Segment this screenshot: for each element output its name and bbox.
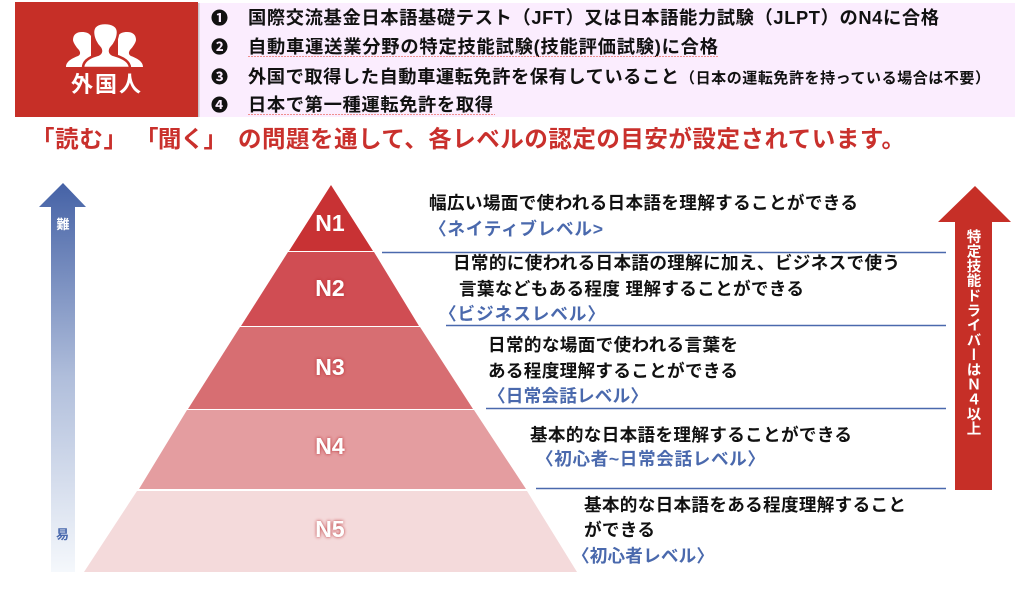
level N1: [289, 185, 373, 251]
description N3: ある程度理解することができる: [488, 361, 738, 381]
label: easy: 易: [56, 527, 69, 542]
description N4: 〈初心者~日常会話レベル〉: [536, 449, 765, 469]
description N4: [530, 425, 852, 469]
level N2: N2: [315, 275, 345, 301]
level N4: N4: [315, 433, 345, 459]
requirement 2: ❷: [211, 38, 228, 57]
heading: の問題を通して、各レベルの認定の目安が設定されています。: [238, 125, 905, 152]
description N2: [439, 253, 900, 324]
label: foreigner: 外国人: [71, 72, 141, 97]
description N1: 幅広い場面で使われる日本語を理解することができる: [429, 193, 858, 213]
level N2: [241, 252, 419, 326]
level N1: N1: [315, 210, 345, 236]
description N5: 〈初心者レベル〉: [572, 546, 714, 566]
level N3: N3: [315, 354, 345, 380]
heading: 「読む」: [31, 126, 127, 152]
panel: foreigner label: [15, 2, 198, 117]
level N3: [188, 327, 473, 409]
requirement 3: （日本の運転免許を持っている場合は不要）: [680, 69, 990, 87]
description N2: 日常的に使われる日本語の理解に加え、ビジネスで使う: [453, 253, 900, 273]
description N5: [572, 495, 906, 566]
requirement 3: [211, 66, 990, 87]
description N5: 基本的な日本語をある程度理解すること: [584, 495, 906, 515]
requirement 3: 外国で取得した自動車運転免許を保有していること: [248, 66, 679, 87]
requirement 1: ❶: [211, 9, 228, 28]
description N5: ができる: [584, 520, 655, 540]
description N4: 基本的な日本語を理解することができる: [530, 425, 852, 445]
requirement 4: 日本で第一種運転免許を取得: [248, 94, 493, 115]
divider lines: [382, 252, 946, 488]
description N3: 日常的な場面で使われる言葉を: [488, 335, 738, 355]
label: difficult: 難: [56, 217, 70, 232]
level N4: [139, 410, 526, 489]
description N1: [429, 193, 858, 239]
arrow: specified skilled driver requirement: [938, 186, 1011, 490]
description N3: [488, 335, 738, 406]
level N5: N5: [315, 516, 345, 542]
arrow: difficulty scale: [39, 183, 86, 572]
arrow label: 特定技能ドライバーはＮ４以上: [964, 229, 981, 436]
panel: requirements list: [198, 3, 1015, 117]
requirement 4: ❹: [211, 96, 228, 115]
level N5: [84, 491, 577, 572]
description N2: 〈ビジネスレベル〉: [439, 304, 605, 324]
pyramid chart: [84, 185, 577, 572]
requirement 1: 国際交流基金日本語基礎テスト（JFT）又は日本語能力試験（JLPT）のN4に合格: [248, 7, 939, 28]
description N3: 〈日常会話レベル〉: [488, 386, 648, 406]
requirement 2: 自動車運送業分野の特定技能試験(技能評価試験)に合格: [248, 36, 718, 57]
description N2: 言葉などもある程度 理解することができる: [459, 279, 804, 299]
heading: 「聞く」: [135, 126, 227, 152]
requirement 3: ❸: [211, 68, 228, 87]
icon: people group: [66, 23, 143, 68]
description N1: 〈ネイティブレベル>: [429, 219, 603, 239]
